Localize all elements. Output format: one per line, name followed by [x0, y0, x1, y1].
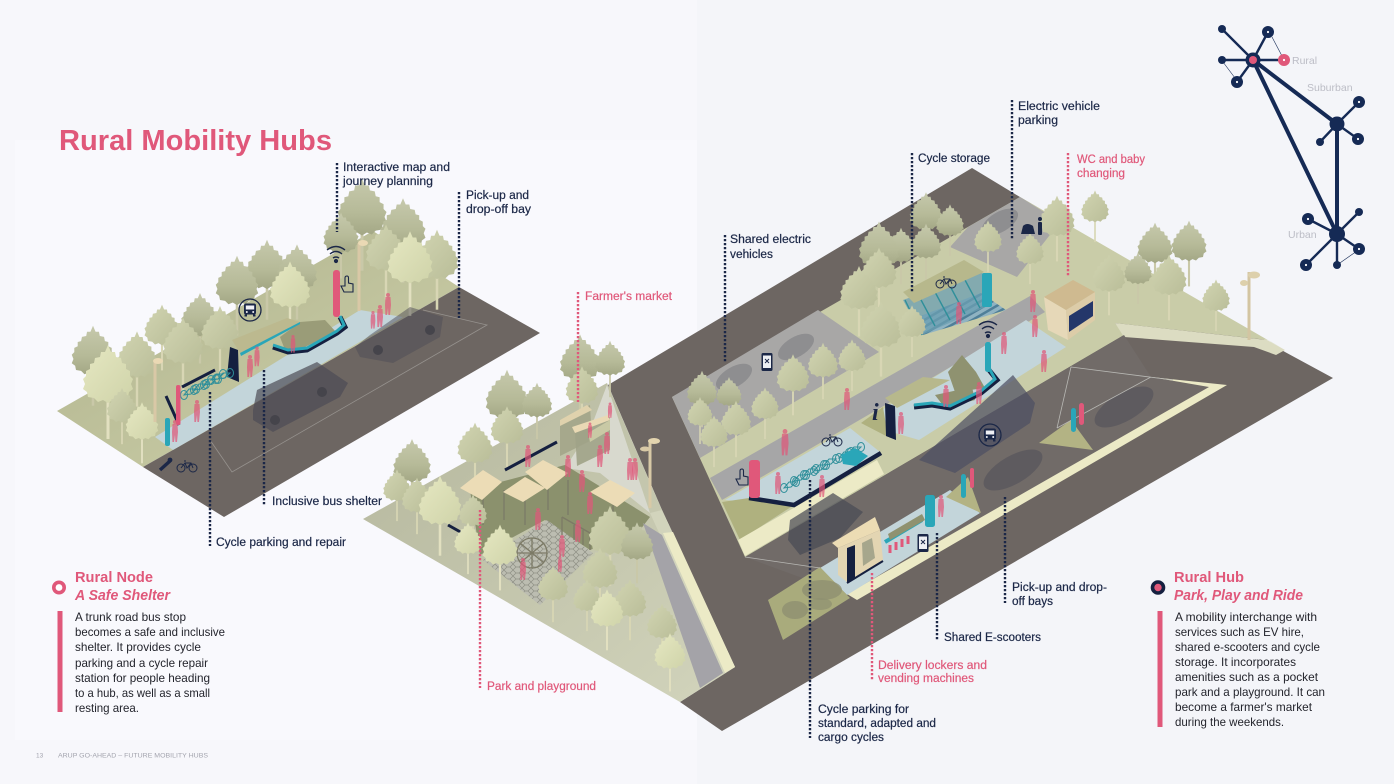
- heading: Rural Hub: [1174, 570, 1244, 586]
- market stalls: [560, 405, 610, 466]
- ground: park: [363, 383, 735, 702]
- hedge bench line: [448, 442, 557, 534]
- labels: hub: vending machines: [878, 673, 974, 685]
- minibus silhouettes: [210, 307, 487, 472]
- body text: during the weekends.: [1175, 715, 1284, 729]
- paved market square: [565, 385, 650, 513]
- body text: storage. It incorporates: [1175, 655, 1296, 669]
- icon: wifi: [327, 246, 345, 262]
- illustration: rural hub road network: [608, 168, 1333, 731]
- road: node trunk road: [143, 287, 540, 517]
- cycle parking and repair stand: [165, 270, 340, 446]
- icon: EV parking: [1021, 217, 1042, 235]
- network connections: [1222, 29, 1359, 265]
- body text: becomes a safe and inclusive: [75, 625, 225, 639]
- footer: ARUP GO-AHEAD – FUTURE MOBILITY HUBS: [58, 752, 209, 760]
- body text: park and a playground. It can: [1175, 685, 1325, 699]
- path and cream kerb: [643, 523, 735, 688]
- street lamp: park: [640, 438, 660, 508]
- icon: touch hub: [736, 469, 748, 485]
- curb: right road edge: [1115, 323, 1285, 355]
- street lamp: hub: [1240, 272, 1260, 340]
- labels: park: Park and playground: [487, 681, 596, 693]
- body text: resting area.: [75, 701, 139, 715]
- road wedge beside park: [650, 510, 735, 673]
- playground surface: [483, 520, 593, 605]
- inner bay road: [745, 335, 1209, 598]
- trees: park front: [419, 476, 686, 691]
- labels: hub: Shared E-scooters: [944, 632, 1041, 644]
- hub nodes: [1218, 25, 1365, 271]
- grass: [470, 465, 650, 555]
- body text: parking and a cycle repair: [75, 656, 208, 670]
- body text: A trunk road bus stop: [75, 610, 186, 624]
- labels: node: Interactive map and: [343, 162, 450, 174]
- delivery lockers: [832, 495, 935, 583]
- illustration: park and market plot: [363, 334, 735, 702]
- panel: rural node text: [54, 570, 225, 715]
- icon: info: i: [872, 400, 879, 426]
- labels: park: Farmer's market: [585, 291, 673, 303]
- labels: hub: Shared electric: [730, 234, 811, 246]
- heading: Rural Node: [75, 570, 153, 586]
- network labels: Rural: [1292, 55, 1317, 67]
- body text: station for people heading: [75, 671, 210, 685]
- subheading: Park, Play and Ride: [1174, 588, 1303, 604]
- labels: node: Cycle parking and repair: [216, 537, 346, 549]
- platform: central shelter: [861, 320, 1066, 440]
- trees: hub mid: [687, 301, 926, 467]
- platform: cycle parking: [725, 428, 880, 505]
- labels: hub: changing: [1077, 168, 1125, 180]
- body text: shared e-scooters and cycle: [1175, 640, 1320, 654]
- body text: become a farmer's market: [1175, 700, 1313, 714]
- icon: bike on parking: [822, 435, 842, 446]
- people: node: [172, 293, 391, 442]
- footer: 13: [36, 752, 44, 760]
- body text: A mobility interchange with: [1175, 610, 1317, 624]
- body text: [1175, 610, 1325, 729]
- green wedge by cycle parking: [722, 498, 794, 540]
- panel: rural hub text: [1152, 570, 1325, 729]
- labels: hub: Cycle parking for: [818, 704, 909, 716]
- subheading: A Safe Shelter: [74, 588, 171, 604]
- WC and baby changing kiosk: [1044, 280, 1095, 340]
- leader lines: [210, 100, 1068, 738]
- network labels: Suburban: [1307, 82, 1353, 94]
- body text: to a hub, as well as a small: [75, 686, 210, 700]
- icon: rural hub marker: [1152, 582, 1164, 593]
- bus shelter: [227, 316, 345, 382]
- ground: node verge: [57, 231, 459, 467]
- title: Rural Mobility Hubs: [59, 125, 332, 157]
- central shelter: [885, 342, 997, 440]
- illustration: rural hub plot: [672, 190, 1285, 640]
- footway platform: [155, 310, 403, 450]
- icon: touch map: [341, 276, 353, 292]
- accent bar: [1158, 611, 1162, 727]
- network labels: Urban: [1288, 229, 1317, 241]
- labels: node: Pick-up and: [466, 190, 529, 202]
- trees: node: [72, 179, 458, 463]
- cream kerbs: [738, 377, 1227, 600]
- labels: hub: parking: [1018, 115, 1058, 127]
- network labels: [1288, 55, 1353, 241]
- labels: park: [487, 291, 673, 693]
- icon: wifi hub: [979, 322, 997, 337]
- accent bar: [58, 611, 62, 712]
- labels: hub: vehicles: [730, 249, 773, 261]
- cycle storage: [903, 260, 1006, 335]
- labels: node: [216, 162, 531, 549]
- icon: bike on storage: [936, 277, 956, 288]
- totems at bays: [961, 403, 1084, 498]
- labels: hub: WC and baby: [1077, 154, 1145, 166]
- play equipment: [517, 517, 590, 568]
- icon: phone scooter: [918, 534, 928, 552]
- ground: hub: [672, 197, 1285, 557]
- bus and car bays: [745, 367, 1173, 568]
- node centres: [1236, 31, 1360, 266]
- canopies: [460, 460, 635, 530]
- illustration: rural node plot: [57, 179, 540, 517]
- body text: amenities such as a pocket: [1175, 670, 1319, 684]
- trees: hub back: [840, 190, 1230, 336]
- rural highlight nodes: [1249, 54, 1290, 66]
- icon: phone EV: [762, 353, 772, 371]
- icon: bus hub: [979, 424, 1001, 446]
- icon: repair and bike: [160, 458, 197, 472]
- street lamps: node: [153, 240, 368, 422]
- labels: hub: cargo cycles: [818, 732, 884, 744]
- cycleway: [710, 296, 1045, 500]
- people: park: [520, 402, 638, 580]
- labels: hub: Electric vehicle: [1018, 101, 1100, 113]
- labels: hub: standard, adapted and: [818, 718, 936, 730]
- body text: services such as EV hire,: [1175, 625, 1304, 639]
- parking bays: [672, 197, 1060, 458]
- labels: hub: [730, 101, 1145, 744]
- labels: hub: off bays: [1012, 596, 1053, 608]
- icon: bus: [239, 299, 261, 321]
- labels: node: Inclusive bus shelter: [272, 496, 382, 508]
- labels: hub: Delivery lockers and: [878, 660, 987, 672]
- platform: lockers: [820, 490, 980, 595]
- planter bush: [280, 320, 336, 350]
- network diagram: [1218, 25, 1365, 271]
- labels: node: drop-off bay: [466, 204, 531, 216]
- shrub bed: [768, 567, 850, 640]
- cycle parking hub: [749, 442, 881, 505]
- icon: rural node marker: [54, 582, 64, 593]
- labels: hub: Pick-up and drop-: [1012, 582, 1107, 594]
- body text: [75, 610, 225, 715]
- labels: node: journey planning: [342, 176, 433, 188]
- body text: shelter. It provides cycle: [75, 640, 201, 654]
- people: hub: [775, 290, 1047, 517]
- labels: hub: Cycle storage: [918, 153, 990, 165]
- trees: park back: [383, 334, 625, 534]
